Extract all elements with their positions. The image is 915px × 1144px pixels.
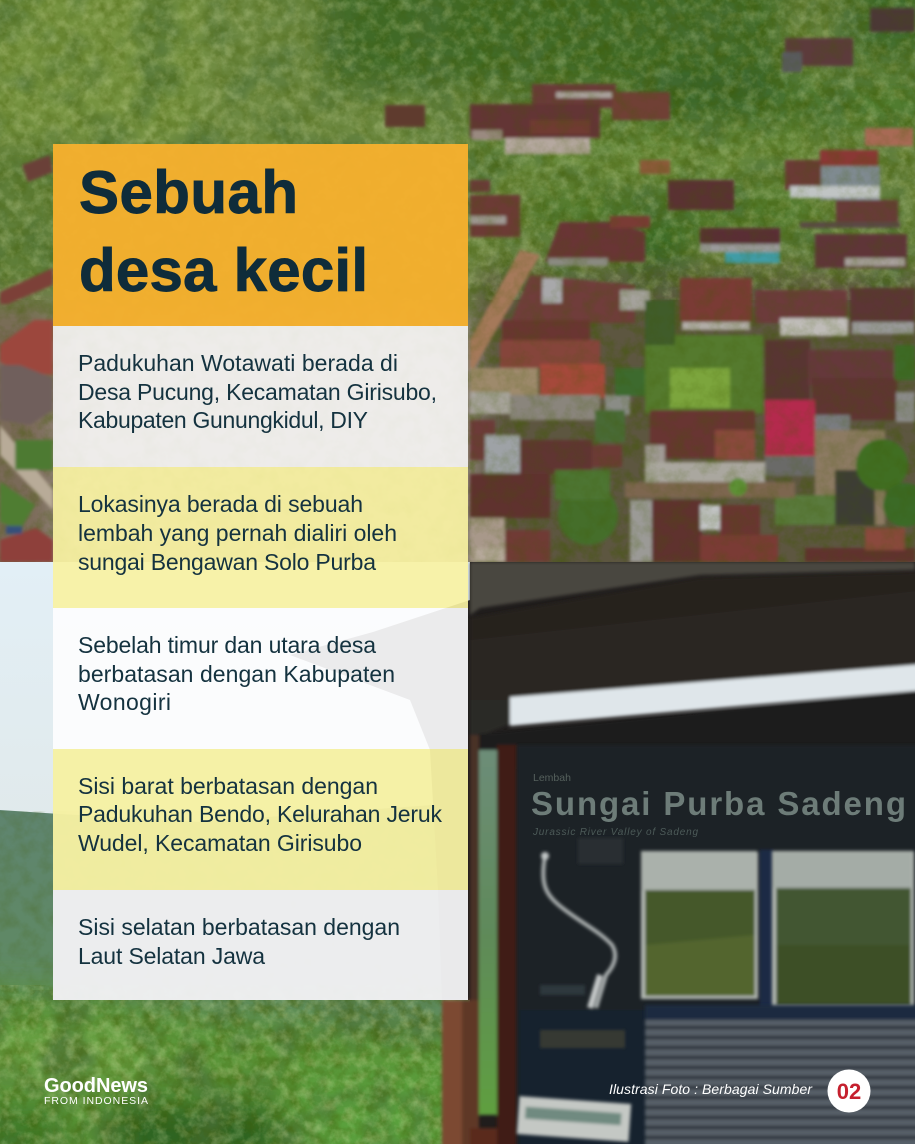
- text: south border: [78, 914, 400, 969]
- text: location: Kabupaten Gunungkidul, DIY: [78, 407, 368, 433]
- text: valley: [78, 491, 397, 575]
- panel: south border: [53, 890, 468, 1000]
- text: west border: [78, 773, 442, 856]
- logo: GoodNews from Indonesia: GoodNews: [44, 1075, 148, 1097]
- panel: location: [53, 326, 468, 467]
- sign photo right: [772, 851, 914, 1011]
- right roofs: [765, 340, 810, 400]
- photo: valley landscape with forest: [0, 562, 470, 1144]
- page number badge: 02: [837, 1079, 861, 1104]
- photo: information board shelter: [290, 562, 915, 1144]
- heading: [79, 159, 368, 304]
- palm and trees: [856, 439, 908, 491]
- sign board: [517, 745, 915, 1144]
- text: east and north border: Sebelah timur dan utara desa: [78, 632, 376, 658]
- posts and strip: [478, 750, 497, 1115]
- text: valley: lembah yang pernah dialiri oleh: [78, 520, 397, 546]
- sign photo left: [641, 851, 758, 999]
- middle row: [470, 250, 540, 375]
- text: east and north border: [78, 632, 395, 715]
- heading: desa kecil: [79, 237, 368, 304]
- field: [645, 335, 763, 413]
- text: south border: Sisi selatan berbatasan dengan: [78, 914, 400, 940]
- text: west border: Sisi barat berbatasan dengan: [78, 773, 378, 799]
- text: location: [78, 350, 437, 433]
- text: west border: Wudel, Kecamatan Girisubo: [78, 830, 362, 856]
- red roof: [765, 400, 815, 457]
- panel: title: [53, 144, 468, 326]
- sign title: [531, 772, 906, 838]
- sign title: Sungai Purba Sadeng: [531, 785, 906, 822]
- sign map: [540, 838, 623, 1008]
- text: east and north border: berbatasan dengan Kabupaten: [78, 661, 395, 687]
- sign title: Lembah: [533, 772, 571, 784]
- left edge: [22, 155, 53, 182]
- sign text blocks: [517, 1005, 915, 1144]
- logo: GoodNews from Indonesia: [44, 1075, 148, 1107]
- logo: GoodNews from Indonesia: FROM INDONESIA: [44, 1095, 148, 1107]
- sign title: Jurassic River Valley of Sadeng: [532, 827, 698, 838]
- text: west border: Padukuhan Bendo, Kelurahan Jeruk: [78, 801, 442, 827]
- text: valley: sungai Bengawan Solo Purba: [78, 549, 376, 575]
- heading: Sebuah: [79, 159, 298, 226]
- text: location: Desa Pucung, Kecamatan Girisubo,: [78, 379, 437, 405]
- text: valley: Lokasinya berada di sebuah: [78, 491, 363, 517]
- top cluster: [532, 84, 616, 108]
- text: location: Padukuhan Wotawati berada di: [78, 350, 398, 376]
- panel: east and north border: [53, 608, 468, 749]
- photo: aerial view of village: [0, 0, 915, 602]
- panel: west border: [53, 749, 468, 890]
- panel: valley: [53, 467, 468, 608]
- bottom roofs: [630, 500, 660, 562]
- shelter roof: [442, 562, 915, 1144]
- page number badge: [828, 1070, 870, 1112]
- text: east and north border: Wonogiri: [78, 689, 171, 715]
- photo credit: Ilustrasi Foto : Berbagai Sumber: [609, 1081, 813, 1097]
- text: south border: Laut Selatan Jawa: [78, 943, 265, 969]
